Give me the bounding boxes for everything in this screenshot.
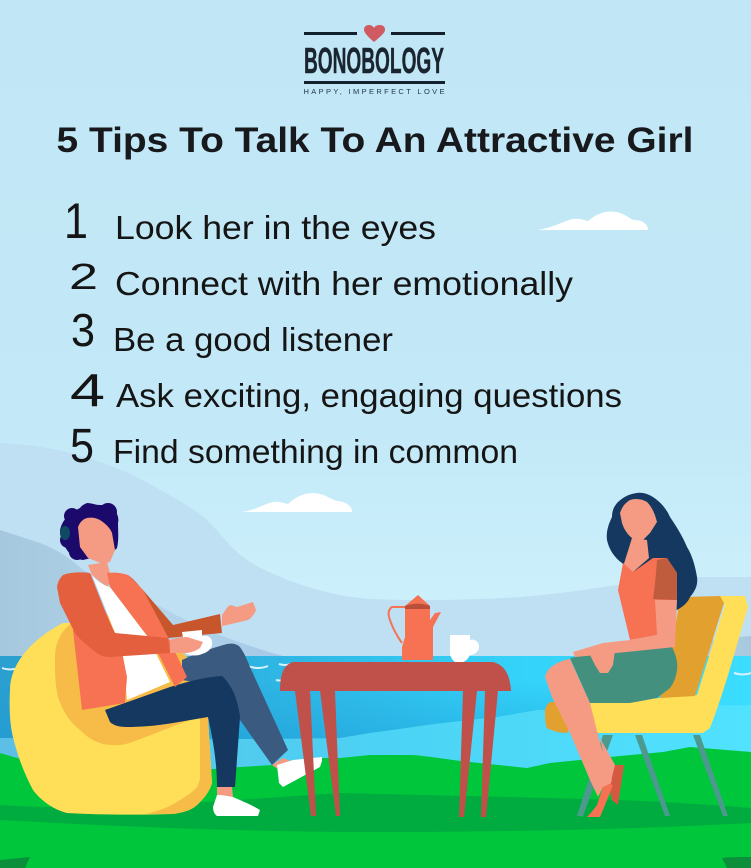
illustration: woman on chair xyxy=(545,493,748,817)
illustration: man on beanbag xyxy=(10,503,322,816)
jacket lapel xyxy=(107,573,187,687)
near hand xyxy=(170,637,203,653)
tip 1 xyxy=(64,193,436,249)
top xyxy=(618,558,677,640)
icon: cup xyxy=(450,635,479,662)
far shoe xyxy=(277,757,322,787)
icon: coffee pot xyxy=(389,595,441,660)
near shoe xyxy=(213,795,260,816)
tip 3 xyxy=(71,304,393,358)
beanbag xyxy=(10,623,212,815)
illustration: table set xyxy=(280,595,511,817)
far arm xyxy=(128,575,222,638)
chair cushion back xyxy=(660,596,724,698)
rear calf and shoe xyxy=(602,743,624,805)
far leg xyxy=(182,644,288,765)
logo wordmark: BONOBOLOGY xyxy=(304,40,444,81)
tip 2: Connect with her emotionally xyxy=(115,265,574,302)
tip 5: Find something in common xyxy=(113,433,518,470)
table legs xyxy=(295,691,498,817)
face xyxy=(620,499,657,540)
sleeve xyxy=(653,558,677,600)
background: sea xyxy=(0,656,751,780)
tip 3: Be a good listener xyxy=(113,321,393,358)
tip 1: 1 xyxy=(64,193,88,249)
tip 5 xyxy=(70,420,518,473)
hair xyxy=(607,493,697,610)
arm xyxy=(573,600,677,657)
skirt xyxy=(570,647,677,703)
hand xyxy=(590,650,615,673)
near leg xyxy=(105,676,240,787)
hair clip xyxy=(60,526,70,540)
near arm xyxy=(57,572,170,657)
logo xyxy=(304,25,445,96)
neck xyxy=(622,538,649,572)
title: 5 Tips To Talk To An Attractive Girl xyxy=(56,121,694,160)
chair seat and back xyxy=(588,596,748,733)
tip 3: 3 xyxy=(71,304,95,356)
chair cushion seat xyxy=(545,700,585,733)
face xyxy=(78,518,115,564)
cloud: upper right xyxy=(537,211,648,230)
jacket body xyxy=(73,590,127,710)
neck xyxy=(88,562,112,587)
hair xyxy=(60,503,118,560)
tip 4: Ask exciting, engaging questions xyxy=(116,377,622,414)
tip 4: 4 xyxy=(70,364,105,416)
tip 2 xyxy=(69,256,574,302)
background: grass xyxy=(0,747,751,868)
chair legs xyxy=(577,735,728,816)
tip 1: Look her in the eyes xyxy=(115,209,436,246)
icon: heart xyxy=(364,25,385,42)
cloud: lower xyxy=(242,493,352,512)
front shoe xyxy=(587,784,613,817)
torso shirt xyxy=(92,575,170,700)
logo tagline: HAPPY, IMPERFECT LOVE xyxy=(304,87,444,96)
tips list xyxy=(64,193,622,473)
tip 2: 2 xyxy=(69,256,98,297)
table top xyxy=(280,662,511,691)
background: far hills xyxy=(0,443,751,680)
leg xyxy=(545,659,612,797)
tip 5: 5 xyxy=(70,420,94,473)
far hand xyxy=(222,602,256,626)
tip 4 xyxy=(70,364,622,416)
mug xyxy=(182,630,212,656)
